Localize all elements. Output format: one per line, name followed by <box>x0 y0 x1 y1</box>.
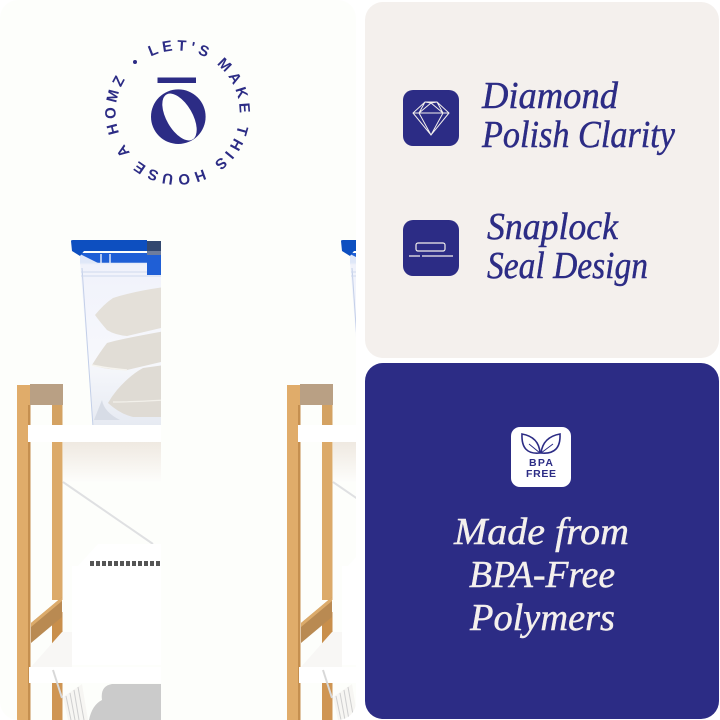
heading: snaplock seal design: Snaplock <box>487 206 619 248</box>
panel: BPA free <box>365 363 719 719</box>
icon: BPA free badge <box>511 427 571 487</box>
product photo: repeated shelf strip <box>287 240 356 720</box>
heading: made from BPA-free polymers: Made from <box>453 511 629 553</box>
heading: diamond polish clarity <box>481 75 675 156</box>
icon: BPA free badge: FREE <box>526 468 556 480</box>
circular slogan: LET'S MAKE THIS HOUSE A HOMZ <box>105 40 250 185</box>
icon: BPA free badge: BPA <box>529 457 553 469</box>
panel: product photo with logo <box>17 40 356 720</box>
panel: features <box>365 2 719 358</box>
icon: diamond <box>403 90 459 146</box>
heading: snaplock seal design <box>487 206 648 287</box>
heading: diamond polish clarity: Polish Clarity <box>481 114 675 156</box>
heading: snaplock seal design: Seal Design <box>487 245 648 287</box>
icon: snaplock seal <box>403 220 459 276</box>
product photo: storage bin on shelf <box>17 240 173 720</box>
heading: made from BPA-free polymers: Polymers <box>469 597 615 639</box>
heading: diamond polish clarity: Diamond <box>481 75 619 117</box>
dot separator <box>133 60 137 64</box>
heading: made from BPA-free polymers: BPA-Free <box>469 554 615 596</box>
heading: made from BPA-free polymers <box>453 511 629 639</box>
logo mark <box>151 78 206 146</box>
